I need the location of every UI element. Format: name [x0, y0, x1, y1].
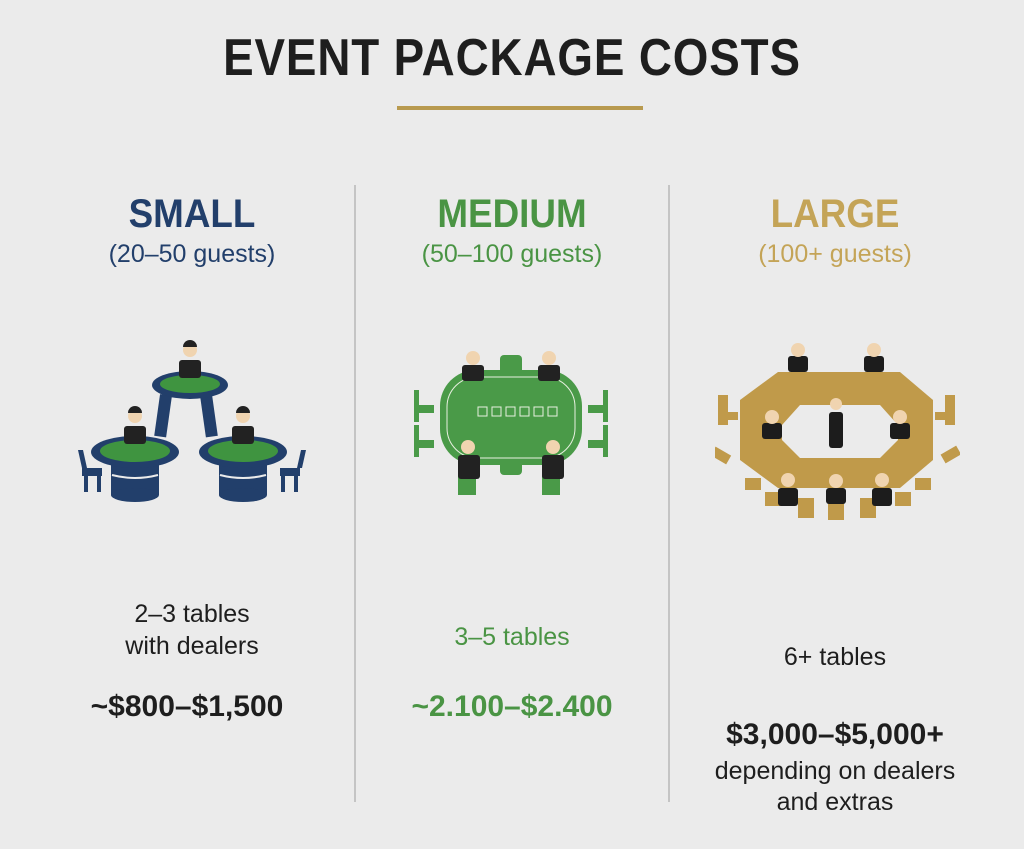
text: large note — [715, 757, 955, 816]
text: large tables: 6+ tables — [784, 643, 886, 671]
column dividers — [354, 185, 356, 802]
price: large: $3,000–$5,000+ — [726, 718, 944, 751]
heading: small: SMALL — [129, 192, 255, 236]
text: small tables — [125, 600, 259, 660]
price: medium: ~2.100–$2.400 — [411, 690, 613, 723]
subheading: small guests: (20–50 guests) — [109, 240, 275, 268]
price: small: ~$800–$1,500 — [91, 690, 283, 723]
icon: oval table — [414, 351, 608, 495]
icon: octagonal table — [715, 343, 960, 520]
subheading: large guests: (100+ guests) — [758, 240, 912, 268]
heading: large: LARGE — [771, 192, 899, 236]
subheading: medium guests: (50–100 guests) — [422, 240, 602, 268]
text: large note: and extras — [777, 788, 893, 816]
panel: small — [78, 192, 306, 723]
text: small tables: 2–3 tables — [134, 600, 250, 628]
icon: three round tables — [78, 340, 306, 502]
title underline — [397, 106, 643, 110]
text: large note: depending on dealers — [715, 757, 955, 785]
heading: medium: MEDIUM — [437, 192, 587, 236]
text: medium tables: 3–5 tables — [454, 623, 570, 651]
panel: medium — [411, 192, 613, 723]
title: EVENT PACKAGE COSTS — [223, 29, 801, 87]
text: small tables: with dealers — [125, 632, 259, 660]
panel: large — [715, 192, 960, 816]
